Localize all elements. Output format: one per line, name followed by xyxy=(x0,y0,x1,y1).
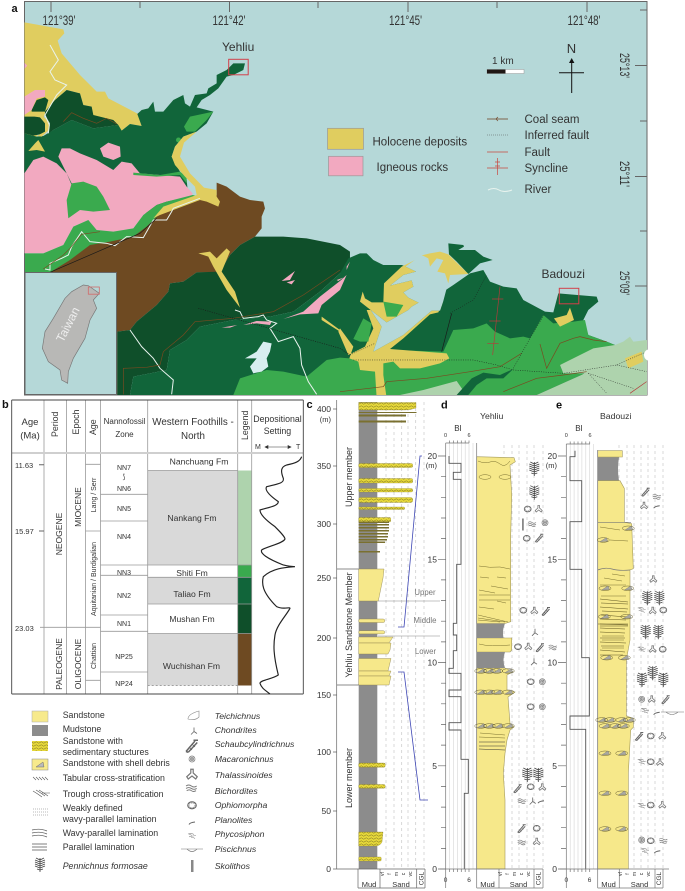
BI axis: BI xyxy=(575,424,583,433)
member labels: Lower member xyxy=(344,748,354,808)
weakly defined lamination: Weakly defined xyxy=(63,803,123,813)
sandstone cap xyxy=(598,451,622,457)
grain size dashed guides xyxy=(619,445,663,869)
stage labels: Aquitanian / Burdigalian xyxy=(91,542,98,616)
nannofossil zones: NN2 xyxy=(117,593,131,600)
Planolites xyxy=(189,815,253,825)
label Taiwan: Taiwan xyxy=(53,305,83,344)
wavy-parallel lamination: Wavy-parallel lamination xyxy=(63,828,158,838)
panel label d: d xyxy=(441,400,448,412)
chart grid xyxy=(40,400,252,694)
unit: Shiti Fm patches near inlet xyxy=(353,302,403,342)
Macaronichnus: Macaronichnus xyxy=(215,754,274,764)
sandstone: Sandstone xyxy=(63,710,105,720)
Planolites: Planolites xyxy=(215,815,253,825)
Chondrites xyxy=(191,725,257,735)
Piscichnus xyxy=(181,844,257,854)
locator box Yehliu xyxy=(229,59,248,75)
grain size labels: c xyxy=(401,872,407,875)
unit: Shiti Fm band xyxy=(25,195,200,273)
panel d: Yehliu section xyxy=(426,400,557,889)
legend: coal seam: Coal seam xyxy=(524,114,579,126)
grain size labels: Sand xyxy=(392,880,410,889)
legend: Holocene deposits: Holocene deposits xyxy=(372,136,467,148)
depth labels: 300 xyxy=(317,519,331,529)
legend: river: River xyxy=(524,184,552,196)
Taiwan island xyxy=(42,285,99,383)
unit: Taliao Fm south patch xyxy=(457,369,513,395)
depth labels: 250 xyxy=(317,573,331,583)
yellow sandstone beds xyxy=(359,569,393,685)
legend: fault: Fault xyxy=(524,147,551,159)
formation names: Shiti Fm xyxy=(176,568,208,578)
north arrow xyxy=(559,41,584,93)
depth axis and member boxes xyxy=(333,400,425,888)
depth labels: 10 xyxy=(548,658,557,668)
mudstone: Mudstone xyxy=(63,724,101,734)
column headers: Epoch xyxy=(71,409,81,434)
Bichordites xyxy=(186,785,258,796)
depth labels: 5 xyxy=(552,761,557,771)
BI step curve xyxy=(449,456,468,869)
BI axis: 6 xyxy=(588,433,592,439)
period and epoch labels: MIOCENE xyxy=(73,487,83,527)
sandstone with shell debris: Sandstone with shell debris xyxy=(63,758,170,768)
grain size labels: f xyxy=(505,873,511,875)
stage labels: Lang / Serr xyxy=(91,477,98,512)
weakly defined lamination xyxy=(33,803,157,824)
legend: inferred fault: Inferred fault xyxy=(524,130,590,142)
sandstone with sedimentary structures: Sandstone with xyxy=(63,736,123,746)
depth labels xyxy=(426,451,437,874)
unit: Nankang Fm south xyxy=(400,381,462,395)
formation names xyxy=(163,456,228,671)
geological units xyxy=(24,22,653,398)
BI scale labels bottom: 6 xyxy=(588,877,592,884)
Skolithos: Skolithos xyxy=(215,861,251,871)
nannofossil zones: NP25 xyxy=(115,654,133,661)
depth ticks xyxy=(558,456,566,869)
shell debris xyxy=(596,526,635,831)
unit labels: Lower xyxy=(415,647,437,656)
depth labels: (m) xyxy=(546,461,557,470)
grain size labels: c xyxy=(639,872,645,875)
grain size labels: vc xyxy=(526,871,532,876)
panel label b: b xyxy=(2,399,9,411)
grain size labels: Mud xyxy=(362,880,376,889)
rivers xyxy=(45,45,317,394)
faults xyxy=(50,218,647,393)
unit: Taliao Fm island xyxy=(448,243,493,274)
Piscichnus: Piscichnus xyxy=(215,844,257,854)
unit: Taliao Fm northwest and Yehliu cape xyxy=(24,63,245,213)
Pennichnus formosae: Pennichnus formosae xyxy=(63,861,148,871)
north arrow: N xyxy=(567,41,576,56)
lamination and bedding xyxy=(598,527,628,655)
grain size labels: CGL xyxy=(656,871,663,885)
unit labels: Middle xyxy=(414,616,436,625)
member labels: Upper member xyxy=(344,447,354,507)
formation fills xyxy=(148,470,252,686)
unit: Taliao Fm central and east xyxy=(130,253,615,395)
nannofossil zones: NN5 xyxy=(117,506,131,513)
depth labels: 150 xyxy=(317,690,331,700)
grain size labels: m xyxy=(512,872,518,876)
grain size labels: CGL xyxy=(418,871,426,885)
legend: Holocene deposits xyxy=(328,128,467,149)
column headers: Age xyxy=(22,417,38,428)
depth labels: (m) xyxy=(320,415,331,424)
unit: Nankang Fm east xyxy=(536,336,647,395)
formation names: Mushan Fm xyxy=(169,614,215,624)
legend: syncline: Syncline xyxy=(524,163,568,175)
trace fossil symbols xyxy=(635,488,684,854)
period and epoch labels: NEOGENE xyxy=(54,512,64,555)
depth labels: 10 xyxy=(428,658,437,668)
tabular cross-stratification: Tabular cross-stratification xyxy=(63,773,165,783)
grain size labels: vf xyxy=(618,871,624,876)
trough cross-stratification: Trough cross-stratification xyxy=(63,789,164,799)
Teichichnus xyxy=(188,711,261,721)
column base line xyxy=(560,450,669,888)
lake xyxy=(245,342,272,373)
unit division lines xyxy=(378,601,440,636)
unit: Mushan Fm northwest xyxy=(24,90,118,136)
scale bar: 1 km xyxy=(492,56,514,67)
panel label a: a xyxy=(12,3,18,15)
column headers: Western Foothills - xyxy=(152,417,234,428)
BI axis xyxy=(444,424,473,888)
sandstone beds with sedimentary structures xyxy=(359,402,416,861)
formation names: Nanchuang Fm xyxy=(170,456,228,466)
Macaronichnus xyxy=(189,754,274,764)
unit: inlet sea xyxy=(371,260,447,352)
column headers: Depositional xyxy=(253,414,302,424)
grain size labels xyxy=(480,871,542,889)
unit: Shiti Fm northwest xyxy=(67,112,213,218)
unit: Holocene coastal deposits northwest xyxy=(24,22,142,140)
formation names: Wuchishan Fm xyxy=(163,661,220,671)
period and epoch labels: OLIGOCENE xyxy=(73,638,83,689)
unit labels xyxy=(414,588,437,656)
Thalassinoides xyxy=(187,769,273,780)
map frame and sea xyxy=(24,2,647,395)
Teichichnus: Teichichnus xyxy=(215,711,261,721)
grain size labels: Mud xyxy=(480,880,495,889)
column headers: M xyxy=(255,444,261,451)
grain size dashed guides xyxy=(386,402,424,869)
chart frame xyxy=(12,400,303,694)
grain size labels: Sand xyxy=(631,880,648,889)
age labels: 11.63 xyxy=(15,461,33,470)
depth labels: 100 xyxy=(317,747,331,757)
depth labels xyxy=(546,451,557,874)
column headers: Age xyxy=(88,419,98,435)
sandstone column upper xyxy=(477,457,515,624)
mudstone bed upper xyxy=(477,624,505,638)
latitude labels: 25°11' xyxy=(617,161,633,187)
unit: igneous rocks northwest xyxy=(24,63,193,253)
panel label c: c xyxy=(306,399,313,411)
column headers: Setting xyxy=(264,426,291,436)
trace fossil symbols xyxy=(514,462,557,845)
grain size labels xyxy=(362,871,426,889)
depth labels: 20 xyxy=(548,451,557,461)
sandstone with sedimentary structures: sedimentary stuctures xyxy=(63,747,149,757)
grain size labels: m xyxy=(632,872,638,876)
Ophiomorpha: Ophiomorpha xyxy=(215,800,268,810)
nannofossil zones: NN3 xyxy=(117,570,131,577)
syncline xyxy=(487,287,647,393)
locator box Badouzi xyxy=(559,288,579,304)
unit: Holocene inlet deposits xyxy=(338,252,643,398)
column headers: Legend xyxy=(240,411,250,440)
legend: lithology and trace fossils xyxy=(32,710,295,872)
depth labels xyxy=(317,404,331,874)
depth labels: 0 xyxy=(326,864,331,874)
stage labels xyxy=(91,477,98,669)
label Yehliu: Yehliu xyxy=(222,40,254,54)
Thalassinoides: Thalassinoides xyxy=(215,770,273,780)
depth labels: 50 xyxy=(322,806,331,816)
age labels xyxy=(15,461,34,633)
correlation lines xyxy=(398,456,428,800)
longitude labels: 121°45' xyxy=(389,12,422,28)
unit: Holocene river strip xyxy=(28,116,49,152)
section title Yehliu: Yehliu xyxy=(480,411,504,421)
panel e: Badouzi section xyxy=(546,400,684,889)
member labels: Yehliu Sandstone Member xyxy=(344,572,354,678)
depth labels: 15 xyxy=(548,554,557,564)
mudstone bed lower xyxy=(477,652,505,668)
mudstone column xyxy=(359,402,377,869)
longitude labels: 121°48' xyxy=(568,12,600,28)
BI scale labels bottom: 0 xyxy=(564,877,568,884)
nannofossil zones: NN4 xyxy=(117,534,131,541)
grain size labels: vf xyxy=(380,871,386,876)
BI axis: 0 xyxy=(444,433,447,439)
map edge notch xyxy=(644,349,656,361)
Schaubcylindrichnus xyxy=(186,739,295,752)
depth labels: 15 xyxy=(428,554,437,564)
BI axis: 6 xyxy=(467,433,471,439)
column headers: Period xyxy=(50,411,60,437)
grain size labels: vf xyxy=(498,871,504,876)
BI scale labels bottom: 6 xyxy=(467,877,471,884)
latitude labels: 25°13' xyxy=(617,53,633,78)
BI scale labels bottom: 0 xyxy=(444,877,448,884)
member labels xyxy=(344,447,354,808)
unit labels: Upper xyxy=(414,588,436,597)
panel c: composite section xyxy=(306,399,440,889)
header rule xyxy=(12,452,303,454)
grain size labels: m xyxy=(394,872,400,876)
grain size labels xyxy=(601,871,663,889)
Phycosiphon xyxy=(188,829,265,839)
grain size labels: f xyxy=(387,873,393,875)
BI step curve xyxy=(570,451,589,869)
longitude labels: 121°42' xyxy=(212,12,246,28)
column headers: Zone xyxy=(115,430,134,439)
shell debris beds xyxy=(475,669,514,728)
Pennichnus formosae xyxy=(35,858,148,872)
grain size labels: vc xyxy=(646,871,652,876)
depth ticks xyxy=(438,456,446,869)
BI scale labels bottom xyxy=(564,877,592,884)
unit: Wuchishan Fm brown xyxy=(52,182,265,395)
period and epoch labels xyxy=(54,487,83,690)
sandstone column xyxy=(598,481,633,869)
column headers: North xyxy=(181,431,205,442)
Schaubcylindrichnus: Schaubcylindrichnus xyxy=(215,739,295,749)
parallel lamination: Parallel lamination xyxy=(63,842,135,852)
grain size labels: c xyxy=(519,872,525,875)
column headers: Nannofossil xyxy=(104,417,146,426)
column headers: T xyxy=(296,444,301,451)
unit: igneous rocks central xyxy=(222,262,350,328)
sandstone with sedimentary structures xyxy=(32,736,149,757)
nannofossil zones: NN6 xyxy=(117,486,131,493)
BI scale labels bottom xyxy=(444,877,471,884)
column headers xyxy=(20,409,302,451)
label Badouzi: Badouzi xyxy=(542,267,585,281)
legend: structural symbols xyxy=(487,114,590,196)
grain size labels: f xyxy=(625,873,631,875)
longitude labels: 121°39' xyxy=(42,12,76,28)
panel b: stratigraphic chart xyxy=(2,399,303,694)
unit: central Holocene valley xyxy=(198,248,240,308)
depth labels: (m) xyxy=(426,461,437,470)
sandstone column middle xyxy=(477,638,512,652)
inset locator box xyxy=(88,287,99,294)
sandstone xyxy=(32,710,105,722)
depth labels: 0 xyxy=(432,864,437,874)
unit: Shiti Fm south xyxy=(233,315,615,395)
grain size labels: Sand xyxy=(510,880,527,889)
nannofossil zones xyxy=(115,465,133,688)
panel a: geological map xyxy=(12,2,656,398)
sandstone with shell debris xyxy=(32,758,170,770)
depth labels: 400 xyxy=(317,404,331,414)
Ophiomorpha xyxy=(188,800,268,810)
legend right: trace fossils xyxy=(181,711,295,872)
weakly defined lamination: wavy-parallel lamination xyxy=(62,814,157,824)
formation names: Nankang Fm xyxy=(167,513,217,523)
legend left: lithology xyxy=(32,710,170,872)
depth labels: 200 xyxy=(317,633,331,643)
Phycosiphon: Phycosiphon xyxy=(215,829,265,839)
Bichordites: Bichordites xyxy=(215,786,258,796)
age labels: 23.03 xyxy=(15,624,34,633)
nannofossil zones: NP24 xyxy=(115,681,133,688)
unit: Holocene strip east xyxy=(322,316,340,331)
latitude labels: 25°09' xyxy=(617,271,633,295)
unit: Mushan Fm central xyxy=(117,237,350,395)
column base line xyxy=(440,443,543,888)
column headers: (Ma) xyxy=(20,430,40,442)
grain size dashed guides xyxy=(504,445,543,869)
stage labels: Chattian xyxy=(91,643,98,669)
section title Badouzi: Badouzi xyxy=(600,411,631,421)
nannofossil zones: NN1 xyxy=(117,621,131,628)
scale bar xyxy=(487,56,524,74)
coal seams xyxy=(43,113,607,394)
depth labels: 20 xyxy=(428,451,437,461)
lamination and bedding xyxy=(478,461,511,750)
BI axis: BI xyxy=(454,424,462,433)
Chondrites: Chondrites xyxy=(215,725,257,735)
depth labels: 0 xyxy=(552,864,557,874)
thin interbedded beds xyxy=(359,412,416,552)
period and epoch labels: PALEOGENE xyxy=(54,638,64,690)
grain size labels: CGL xyxy=(536,871,542,885)
panel label e: e xyxy=(556,400,562,412)
latitude labels xyxy=(617,53,633,295)
unit: Holocene coastal strip xyxy=(153,132,220,218)
mudstone xyxy=(32,724,101,736)
BI axis: 0 xyxy=(565,433,568,439)
nannofossil zones: NN7 xyxy=(117,465,131,472)
Skolithos xyxy=(191,860,251,872)
depth labels: 350 xyxy=(317,461,331,471)
nannofossil zones: ⟆ xyxy=(123,473,126,481)
inset: Taiwan locator xyxy=(25,272,116,394)
grain size labels: vc xyxy=(408,871,414,876)
longitude and latitude ticks xyxy=(51,2,647,286)
depositional setting curve xyxy=(260,457,302,694)
formation names: Taliao Fm xyxy=(173,589,211,599)
longitude labels xyxy=(42,12,600,28)
sandstone column lower xyxy=(477,668,515,869)
BI axis xyxy=(565,424,594,888)
mudstone bed xyxy=(598,457,619,481)
legend: Igneous rocks xyxy=(328,156,448,176)
depth labels: 5 xyxy=(432,761,437,771)
age ticks xyxy=(39,465,44,531)
grain size labels: Mud xyxy=(601,880,616,889)
legend: Igneous rocks: Igneous rocks xyxy=(376,162,448,174)
age labels: 15.97 xyxy=(15,527,34,536)
